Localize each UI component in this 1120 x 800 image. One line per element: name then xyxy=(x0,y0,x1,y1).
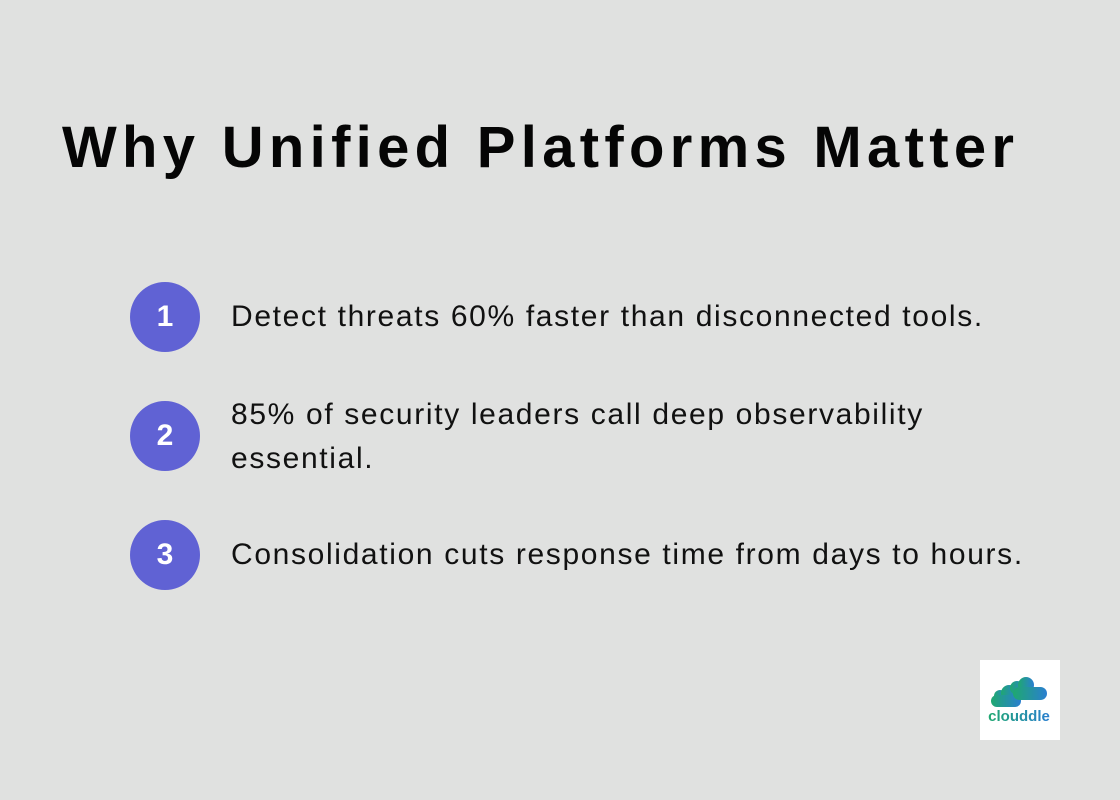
number badge 2: 2 xyxy=(157,419,173,452)
item 3 xyxy=(130,520,1024,590)
number badge 1: 1 xyxy=(157,300,173,333)
logo: clouddle xyxy=(988,708,1050,725)
text 1: Detect threats 60% faster than disconnected tools. xyxy=(231,300,984,333)
text 2: 85% of security leaders call deep observability xyxy=(231,398,924,431)
text 3: Consolidation cuts response time from days to hours. xyxy=(231,538,1024,571)
text 2: essential. xyxy=(231,442,374,475)
number badge 3: 3 xyxy=(157,538,173,571)
logo xyxy=(980,660,1060,740)
number badge 1 xyxy=(130,282,200,352)
number badge 2 xyxy=(130,401,200,471)
item 2 xyxy=(130,398,924,475)
number badge 3 xyxy=(130,520,200,590)
title: Why Unified Platforms Matter xyxy=(62,115,1019,180)
text 2 xyxy=(231,398,924,475)
item 1 xyxy=(130,282,984,352)
